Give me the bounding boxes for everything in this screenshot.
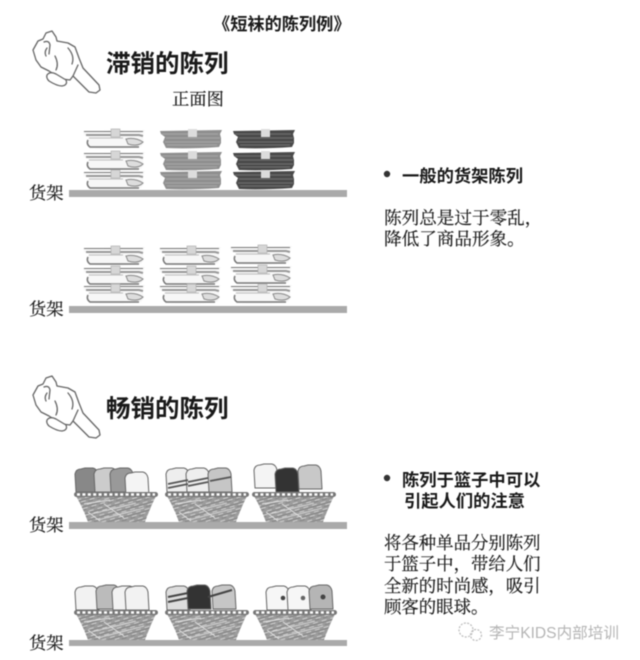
watermark [459,623,619,642]
shelf label: 货架 [29,516,64,535]
shelf [69,306,347,313]
heading: best-selling display: 畅销的陈列 [106,395,228,423]
label: front view: 正面图 [172,90,224,109]
icon: pointing hand [33,376,100,438]
socks in basket 1 [75,468,149,496]
icon: pointing hand [33,31,100,93]
sock stacks: white [83,129,145,190]
shelf [69,640,347,646]
basket display 1 [29,464,347,535]
socks in basket 3 [266,585,333,610]
shelf display 1 [29,129,347,203]
subheading: 引起人们的注意 [404,491,525,511]
description: 于篮子中，带给人们 [384,554,541,574]
description: 降低了商品形象。 [384,229,525,249]
description: 顾客的眼球。 [384,597,488,617]
baskets [74,492,336,522]
heading: slow-selling display: 滞销的陈列 [106,50,228,78]
description: 全新的时尚感，吸引 [384,576,541,596]
bullet [384,475,390,481]
icon: chat bubbles [459,623,482,640]
text block: baskets attract attention [384,470,541,617]
shelf label: 货架 [29,634,64,653]
shelf [69,190,347,197]
shelf display 2 [29,245,347,319]
socks in basket 2 [166,468,232,492]
section: best-selling display [29,376,347,653]
socks in basket 3 [254,464,322,492]
subheading: 一般的货架陈列 [402,166,523,186]
section: slow-selling display [29,31,347,319]
bullet [384,171,390,177]
sock stacks: dark [233,129,295,189]
text block: ordinary shelf display [384,166,542,249]
socks in basket 1 [75,585,149,610]
shelf [69,522,347,529]
description: 将各种单品分别陈列 [384,533,541,553]
socks in basket 2 [166,585,236,610]
description: 陈列总是过于零乱， [384,208,542,228]
sock stacks: all white [83,245,292,304]
baskets [74,610,337,640]
sock stacks: grey [160,129,222,189]
basket display 2 [29,585,347,653]
shelf label: 货架 [29,300,64,319]
title: 《短袜的陈列例》 [213,14,351,34]
shelf label: 货架 [29,184,64,203]
subheading: 陈列于篮子中可以 [402,470,540,490]
watermark text: 李宁KIDS内部培训 [489,624,619,642]
